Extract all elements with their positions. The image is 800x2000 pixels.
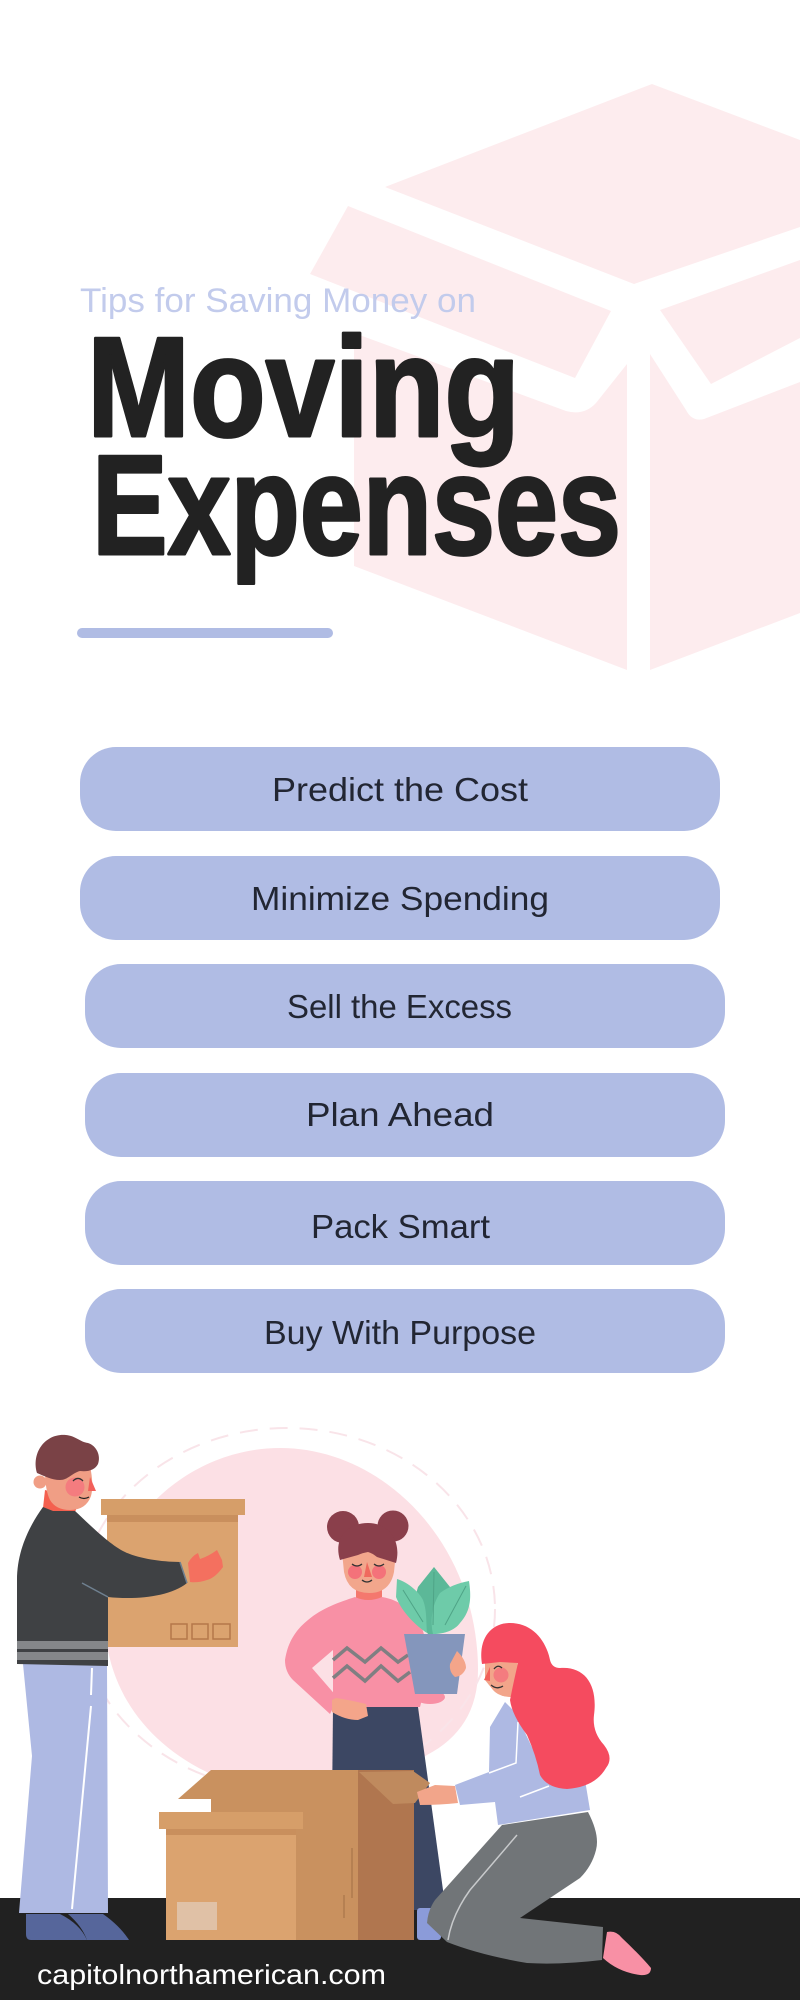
held box: [101, 1499, 245, 1647]
plant leaves: [396, 1567, 470, 1634]
tip: Pack Smart: Pack Smart: [311, 1208, 490, 1245]
hair buns: [327, 1510, 408, 1543]
dashed ring: [79, 1428, 495, 1790]
tip: Minimize Spending: Minimize Spending: [251, 880, 549, 917]
tip: Sell the Excess: [85, 964, 725, 1048]
tip: Pack Smart: [85, 1181, 725, 1265]
illustration: man with box: [17, 1435, 245, 1940]
face: [484, 1660, 518, 1697]
tip: Sell the Excess: Sell the Excess: [287, 988, 512, 1025]
background box icon: [310, 84, 800, 670]
long hair: [481, 1623, 610, 1789]
tip: Predict the Cost: Predict the Cost: [272, 771, 528, 808]
trousers: [331, 1707, 443, 1910]
illustration: small closed box: [159, 1812, 303, 1940]
tip: Buy With Purpose: [85, 1289, 725, 1373]
hair: [36, 1435, 99, 1480]
face: [34, 1466, 96, 1510]
illustration: kneeling woman: [417, 1623, 651, 1975]
tip: Predict the Cost: [80, 747, 720, 831]
plant pot: [404, 1634, 465, 1694]
tip: Plan Ahead: Plan Ahead: [306, 1096, 494, 1133]
title underline: [77, 628, 333, 638]
title: Expenses: [92, 426, 621, 585]
subtitle: Tips for Saving Money on: [80, 282, 476, 320]
hand on pot: [450, 1651, 466, 1677]
shoes: [26, 1914, 129, 1940]
hand on box: [417, 1785, 458, 1805]
hand: [188, 1550, 223, 1582]
pink background blob: [105, 1448, 478, 1775]
neck: [356, 1588, 382, 1600]
hair: [338, 1523, 397, 1563]
title: [87, 308, 621, 585]
tip list: [80, 747, 725, 1373]
sweater: [17, 1507, 187, 1666]
shoe: [417, 1908, 441, 1940]
foot: [603, 1932, 651, 1975]
trousers: [19, 1664, 108, 1913]
title: Moving: [87, 308, 520, 467]
trousers: [427, 1812, 603, 1964]
sweater: [285, 1597, 445, 1714]
illustration: open moving box: [178, 1770, 430, 1940]
top: [455, 1702, 590, 1825]
footer band: [0, 1898, 800, 2000]
tip: Minimize Spending: [80, 856, 720, 940]
hand on hip: [332, 1698, 368, 1720]
illustration: girl with plant: [285, 1510, 470, 1940]
tip: Plan Ahead: [85, 1073, 725, 1157]
website url: capitolnorthamerican.com: [37, 1959, 386, 1990]
neck: [43, 1490, 80, 1512]
tip: Buy With Purpose: Buy With Purpose: [264, 1314, 536, 1351]
face: [342, 1552, 396, 1593]
